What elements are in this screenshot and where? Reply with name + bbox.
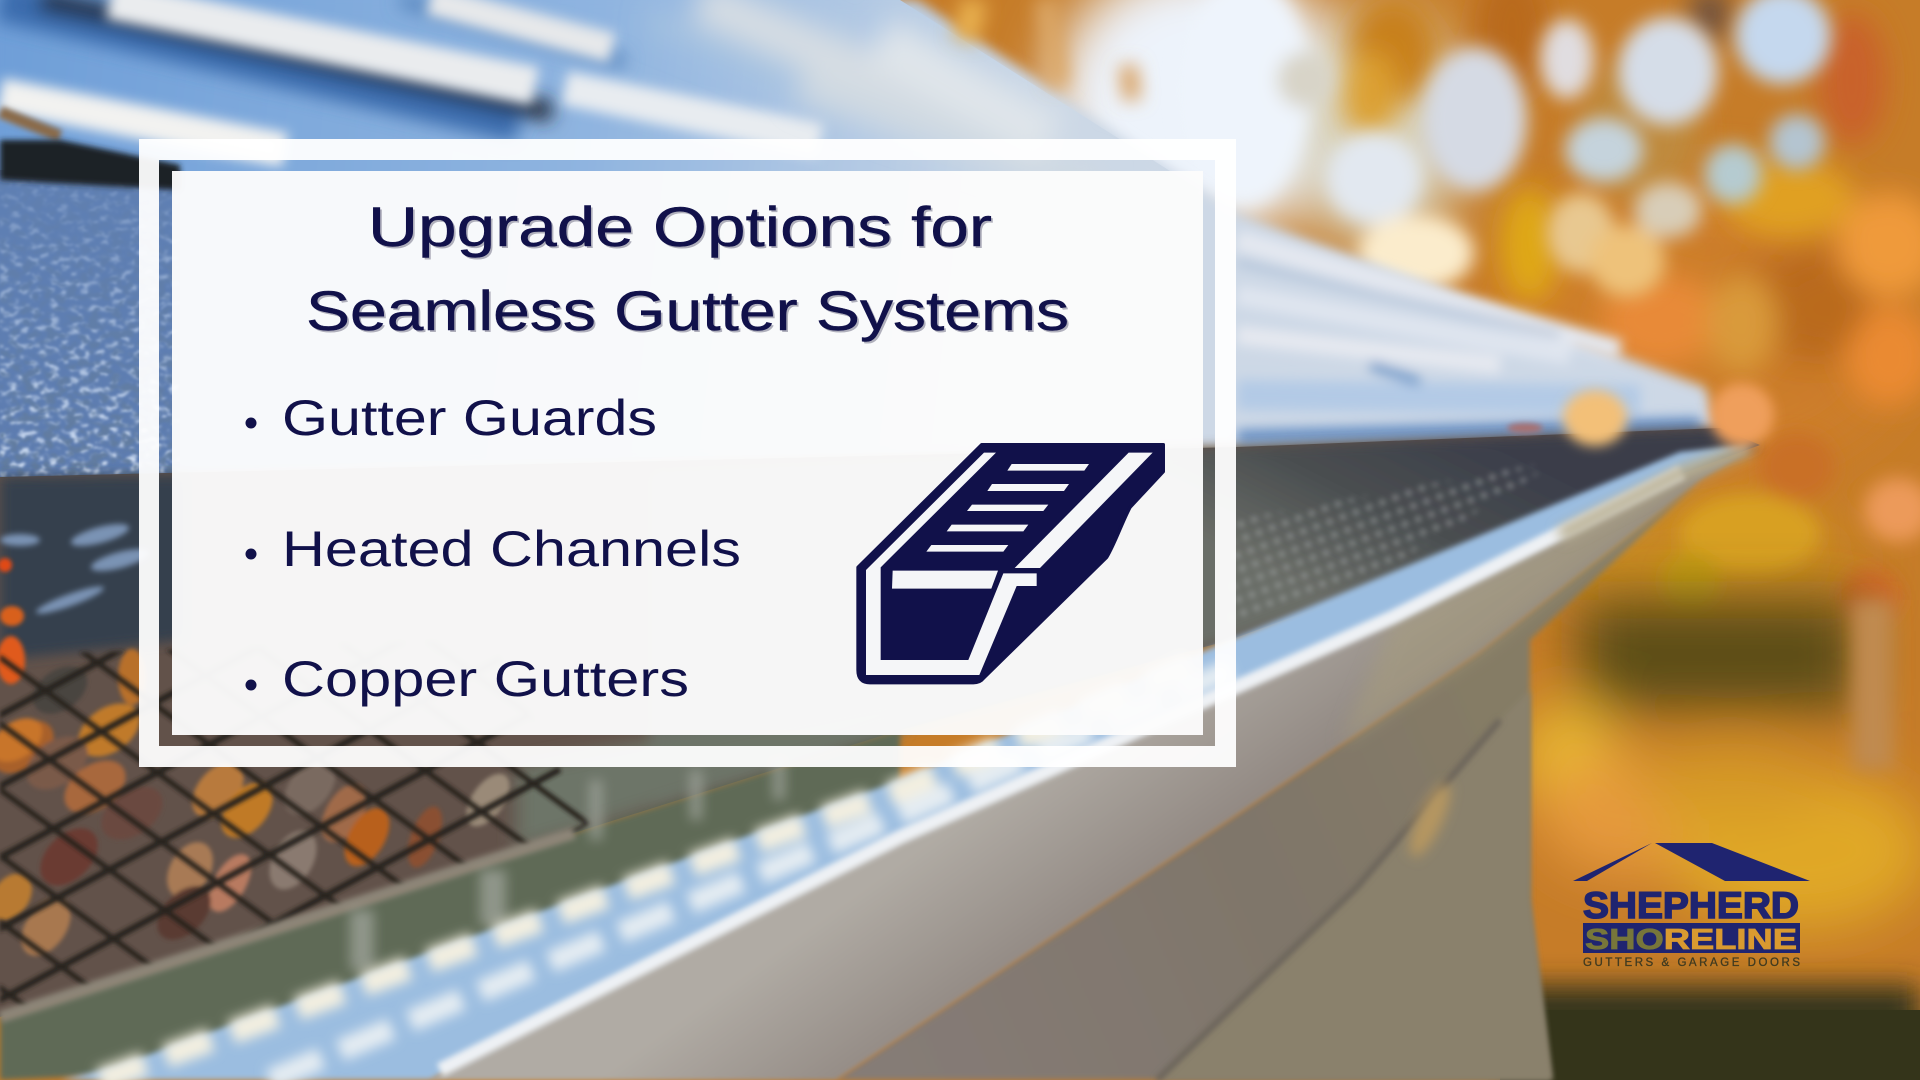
background: gutter mesh guard with leaves: [0, 428, 1760, 1017]
mesh wires: [0, 640, 590, 1017]
logo wordmark: GUTTERS & GARAGE DOORS: [1583, 957, 1800, 969]
background: aluminium gutter front and lip: [60, 445, 1750, 1080]
background: lower garden: [1520, 600, 1920, 930]
sky edge with orange streaks near the ridge: [965, 0, 1132, 100]
background: blurred warm highlights at the roof end: [1507, 383, 1774, 447]
outer frame: [139, 139, 1236, 767]
inner card: [172, 171, 1203, 735]
roof streaks upper left: [0, 0, 625, 122]
bulleted list of upgrade options: [246, 390, 741, 707]
heading: [306, 195, 1071, 344]
background: roof shingles: [0, 0, 1720, 480]
heading: Upgrade Options for: [370, 197, 994, 260]
roof streaks right end: [1237, 240, 1700, 437]
logo wordmark: SHO RELINE: [1585, 924, 1797, 956]
heading: Seamless Gutter Systems: [306, 279, 1069, 342]
background: shingle gravel at left edge: [0, 140, 180, 478]
item: Heated Channels: Heated Channels: [282, 521, 741, 577]
heading: Upgrade Options for: [368, 195, 992, 258]
background: autumn trees and sky bokeh: [1050, 0, 1920, 1080]
logo: Shepherd Shoreline Gutters & Garage Doors: [1573, 843, 1810, 969]
logo wordmark: [1583, 885, 1800, 969]
logo wordmark: SHEPHERD: [1583, 885, 1799, 926]
item: Gutter Guards: Gutter Guards: [282, 390, 657, 446]
background: gutter interior below mesh: [0, 730, 900, 1080]
panel: translucent white frame and content card: [139, 139, 1236, 767]
blue highlights on upper mesh: [0, 520, 151, 618]
heading: Seamless Gutter Systems: [308, 281, 1071, 344]
logo roof: [1573, 843, 1810, 881]
leaves caught in mesh: [0, 558, 518, 965]
icon: gutter with guard: [856, 443, 1165, 684]
item: Copper Gutters: Copper Gutters: [282, 651, 689, 707]
background: wall below the gutter: [836, 480, 1700, 1080]
